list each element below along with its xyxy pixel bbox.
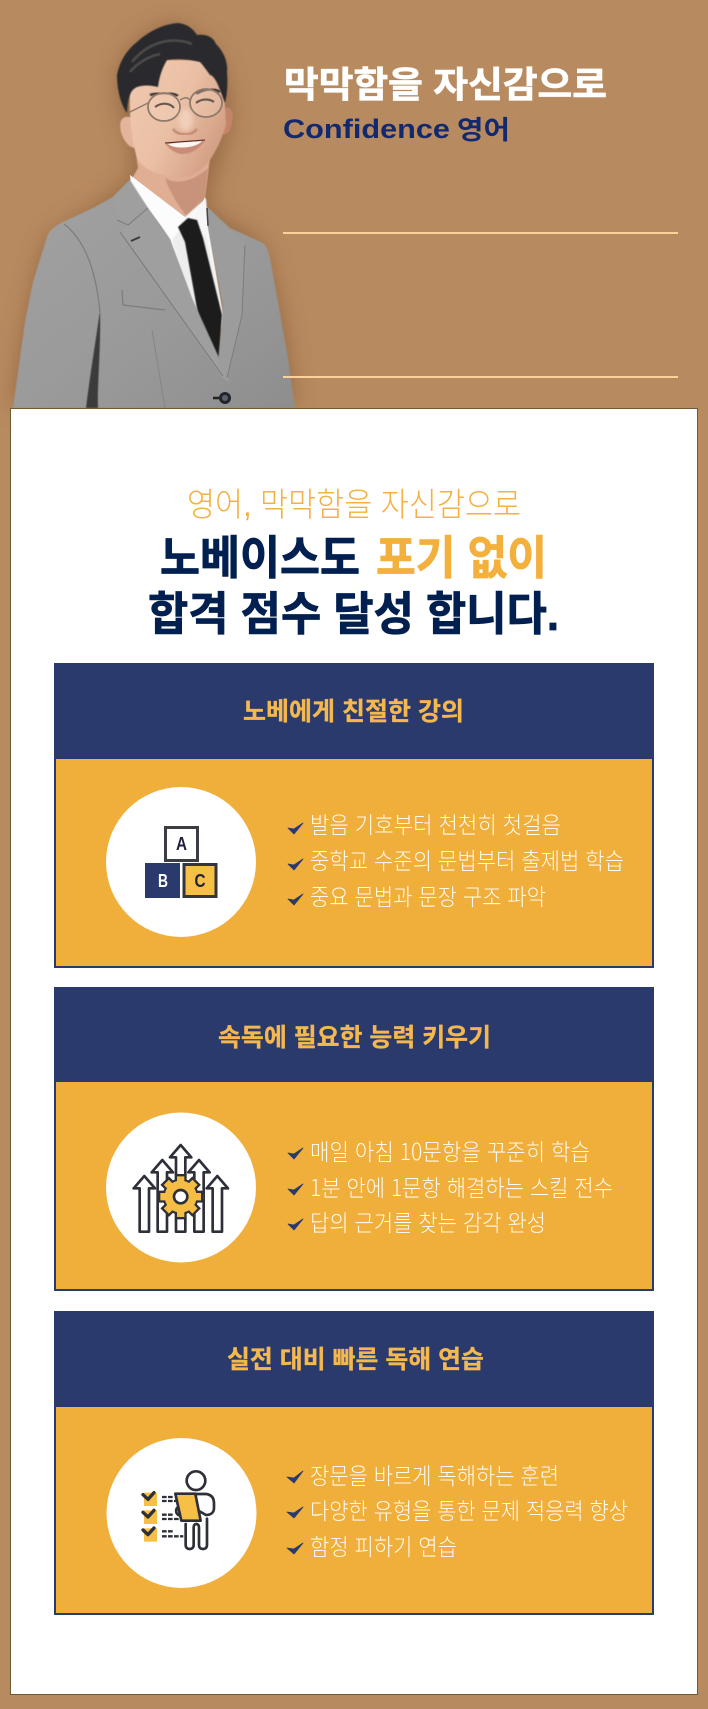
bullet list <box>287 1457 628 1562</box>
icon: arrows and gear <box>106 1112 256 1262</box>
panel heading: 속독에 필요한 능력 키우기 <box>218 1024 491 1052</box>
bullet list <box>288 806 624 912</box>
lapels <box>113 180 230 382</box>
nose <box>173 129 197 134</box>
eyebrows <box>150 93 178 96</box>
panel: 실전 대비 빠른 독해 연습 <box>54 1311 654 1615</box>
bullet list: 매일 아침 10문항을 꾸준히 학습 <box>310 1133 590 1167</box>
bullet list: 답의 근거를 찾는 감각 완성 <box>310 1204 546 1238</box>
shirt <box>130 180 224 370</box>
panel: 속독에 필요한 능력 키우기 <box>54 987 654 1291</box>
section heading: 노베이스도 <box>160 532 360 584</box>
section heading: 영어, 막막함을 자신감으로 <box>187 486 521 523</box>
hair <box>117 23 227 113</box>
glasses <box>148 93 180 121</box>
bullet list: 함정 피하기 연습 <box>310 1528 457 1562</box>
icon: ABC blocks <box>106 787 256 937</box>
jacket <box>13 180 295 408</box>
face <box>130 60 226 177</box>
bullet list: 장문을 바르게 독해하는 훈련 <box>310 1457 559 1491</box>
section heading: 포기 없이 <box>376 532 547 584</box>
icon: ABC blocks: C <box>194 871 206 891</box>
icon: ABC blocks: B <box>158 871 168 891</box>
bullet list: 발음 기호부터 천천히 첫걸음 <box>310 806 561 840</box>
bullet list <box>288 1133 613 1238</box>
panel heading: 실전 대비 빠른 독해 연습 <box>227 1346 484 1374</box>
collar <box>130 175 185 240</box>
bullet list: 1분 안에 1문항 해결하는 스킬 전수 <box>310 1169 613 1203</box>
white content panel <box>10 408 698 1694</box>
seams <box>86 310 100 408</box>
shirt front <box>172 225 224 345</box>
panel heading: 노베에게 친절한 강의 <box>243 698 464 726</box>
neck <box>130 140 211 218</box>
icon: ABC blocks: A <box>176 834 187 854</box>
portrait of instructor <box>13 23 295 408</box>
subtitle <box>283 114 510 145</box>
tie <box>178 218 222 368</box>
subtitle: Confidence <box>283 114 450 144</box>
bullet list: 다양한 유형을 통한 문제 적응력 향상 <box>310 1492 628 1526</box>
subtitle: 영어 <box>457 115 510 145</box>
bullet list: 중요 문법과 문장 구조 파악 <box>310 878 546 912</box>
panel: 노베에게 친절한 강의 <box>54 663 654 968</box>
section heading <box>148 486 559 640</box>
icon: person with checklist <box>106 1438 256 1588</box>
ears <box>120 117 137 148</box>
section heading: 합격 점수 달성 합니다. <box>148 588 559 640</box>
bullet list: 중학교 수준의 문법부터 출제법 학습 <box>310 842 624 876</box>
mouth <box>165 140 205 154</box>
eyes <box>155 104 174 108</box>
main title: 막막함을 자신감으로 <box>284 64 607 105</box>
